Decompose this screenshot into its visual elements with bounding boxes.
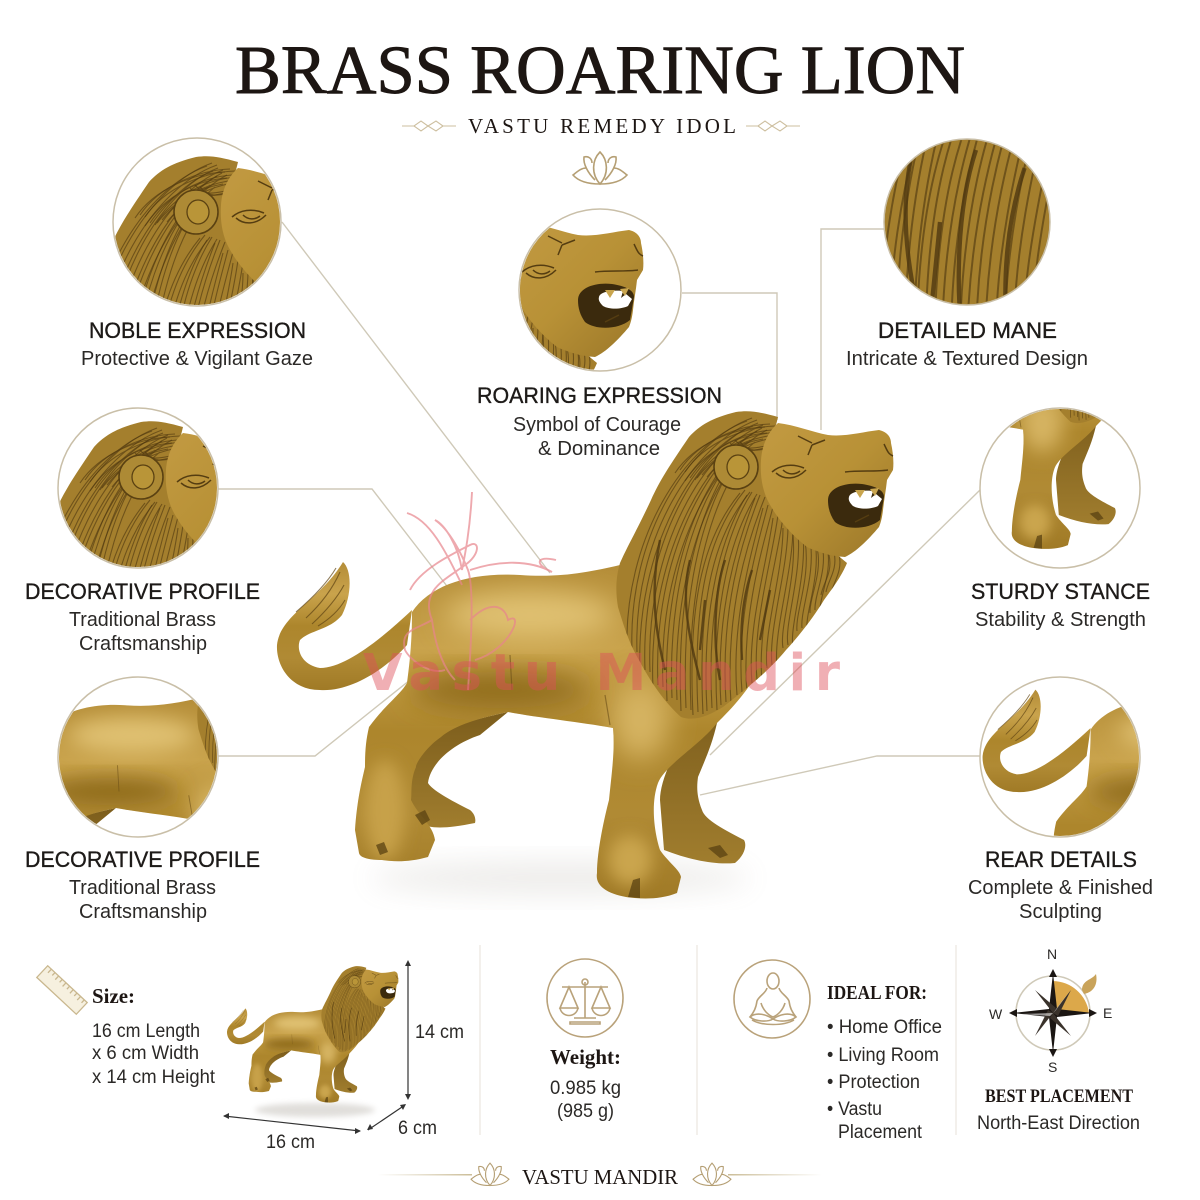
panel: noble expression: Protective & Vigilant Gaze bbox=[81, 348, 313, 370]
watermark: Vastu Mandir bbox=[363, 644, 840, 703]
panel: rear details bbox=[969, 676, 1152, 922]
panel: noble expression: NOBLE EXPRESSION bbox=[89, 318, 306, 343]
panel: weight: (985 g) bbox=[557, 1101, 614, 1122]
panel: size spec bbox=[37, 966, 216, 1088]
panel: detailed mane bbox=[848, 138, 1087, 369]
panel: roaring expression bbox=[478, 208, 720, 455]
panel: ideal for: • Home Office bbox=[827, 1017, 942, 1038]
subtitle with ornaments bbox=[402, 114, 800, 138]
panel: rear details: Complete & Finished bbox=[968, 877, 1153, 899]
small lion with dimensions: 14 cm bbox=[415, 1022, 464, 1043]
panel: detailed mane: Intricate & Textured Design bbox=[846, 348, 1088, 370]
title: BRASS ROARING LION bbox=[235, 32, 965, 108]
panel: decorative profile 2: DECORATIVE PROFILE bbox=[25, 847, 260, 872]
panel: size spec: x 14 cm Height bbox=[92, 1067, 216, 1088]
panel: ideal for: Placement bbox=[838, 1122, 923, 1143]
panel: rear details: Sculpting bbox=[1019, 901, 1102, 923]
panel: detailed mane: DETAILED MANE bbox=[878, 318, 1057, 343]
shadow under lion bbox=[370, 862, 750, 894]
panel: sturdy stance bbox=[972, 407, 1150, 630]
watermark bbox=[363, 492, 840, 703]
panel: ideal for bbox=[734, 960, 942, 1143]
icon: meditation figure bbox=[734, 960, 810, 1038]
panel: ideal for: • Living Room bbox=[827, 1045, 939, 1066]
panel: best placement: N bbox=[1047, 946, 1057, 962]
panel: size spec: 16 cm Length bbox=[92, 1021, 200, 1042]
panel: roaring expression: ROARING EXPRESSION bbox=[477, 383, 722, 408]
small lion with dimensions: 6 cm bbox=[398, 1118, 437, 1139]
small lion with dimensions bbox=[223, 960, 464, 1153]
small lion with dimensions: 16 cm bbox=[266, 1132, 315, 1153]
panel: decorative profile 2: Traditional Brass bbox=[69, 877, 216, 899]
panel: roaring expression: Symbol of Courage bbox=[513, 414, 681, 436]
footer brand bbox=[378, 1163, 822, 1189]
panel: weight: Weight: bbox=[550, 1045, 621, 1069]
panel: best placement: S bbox=[1048, 1059, 1057, 1075]
panel: decorative profile 1 bbox=[26, 407, 260, 654]
main lion illustration bbox=[277, 411, 893, 898]
panel: ideal for: • Vastu bbox=[827, 1099, 882, 1120]
icon: balance scale bbox=[547, 959, 623, 1037]
subtitle with ornaments: VASTU REMEDY IDOL bbox=[468, 114, 736, 138]
panel: best placement: E bbox=[1103, 1005, 1112, 1021]
panel: best placement: North-East Direction bbox=[977, 1113, 1140, 1134]
icon: compass bbox=[1009, 969, 1097, 1057]
panel: size spec: x 6 cm Width bbox=[92, 1043, 199, 1064]
panel: decorative profile 1: Craftsmanship bbox=[79, 633, 207, 655]
panel: size spec: Size: bbox=[92, 984, 135, 1008]
footer brand: VASTU MANDIR bbox=[522, 1165, 678, 1189]
leader lines bbox=[218, 222, 980, 795]
panel: ideal for: IDEAL FOR: bbox=[827, 982, 927, 1004]
panel: decorative profile 2 bbox=[26, 676, 260, 922]
panel: decorative profile 2: Craftsmanship bbox=[79, 901, 207, 923]
panel: decorative profile 1: DECORATIVE PROFILE bbox=[25, 579, 260, 604]
panel: rear details: REAR DETAILS bbox=[985, 847, 1137, 872]
icon: ruler bbox=[37, 966, 87, 1014]
panel: best placement bbox=[977, 946, 1140, 1134]
panel: best placement: BEST PLACEMENT bbox=[985, 1086, 1133, 1107]
panel: roaring expression: & Dominance bbox=[538, 438, 660, 460]
panel: sturdy stance: STURDY STANCE bbox=[971, 579, 1150, 604]
icon: lotus bbox=[573, 152, 627, 184]
panel: weight: 0.985 kg bbox=[550, 1078, 621, 1099]
panel: best placement: W bbox=[989, 1006, 1003, 1022]
panel: weight bbox=[547, 959, 623, 1122]
panel: noble expression bbox=[82, 137, 312, 369]
panel: decorative profile 1: Traditional Brass bbox=[69, 609, 216, 631]
panel: sturdy stance: Stability & Strength bbox=[975, 609, 1146, 631]
panel: ideal for: • Protection bbox=[827, 1072, 920, 1093]
